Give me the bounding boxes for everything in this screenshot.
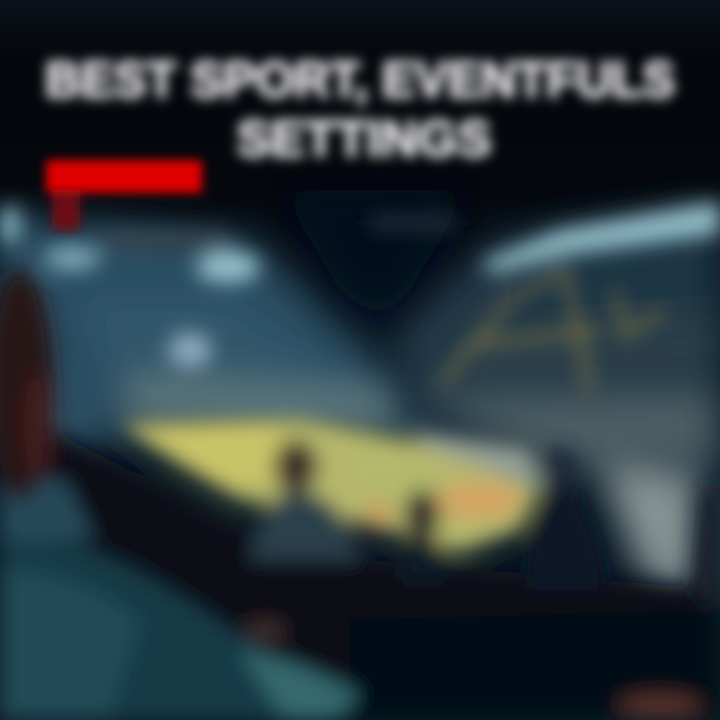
warm accent bottom right	[245, 622, 702, 718]
title: BEST SPORT, EVENTFULS	[45, 51, 675, 108]
foreground spectator left	[0, 269, 360, 720]
playing field	[120, 418, 545, 552]
spectator silhouettes	[250, 440, 720, 610]
foreground crowd	[0, 430, 720, 720]
roof lights	[0, 202, 720, 368]
orange light traces on right stands	[440, 270, 665, 390]
title: SETTINGS	[236, 110, 492, 167]
title	[45, 51, 675, 167]
stadium right stands	[400, 200, 720, 600]
central dark roof gap	[280, 190, 470, 320]
red label tag	[46, 160, 202, 230]
stadium left stands	[0, 215, 420, 470]
blurred scene details	[0, 202, 720, 720]
